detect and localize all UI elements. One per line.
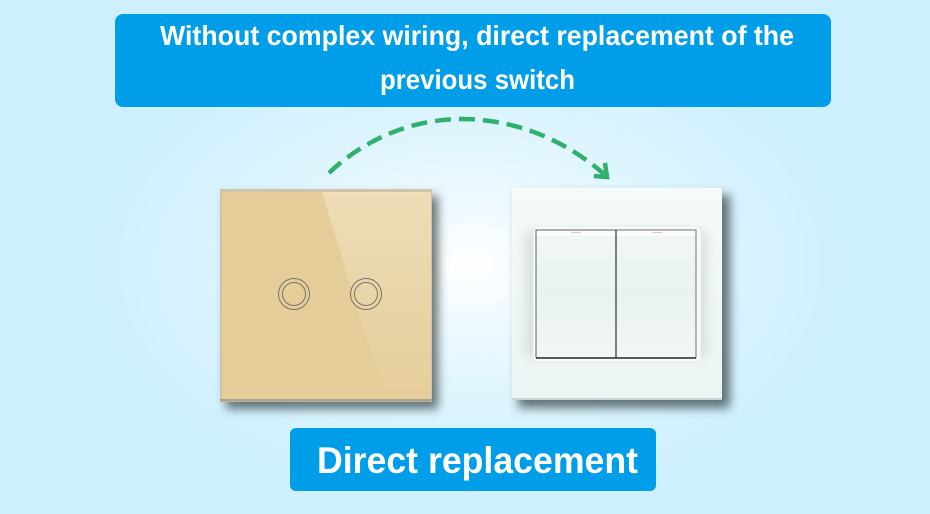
banner text line 2: previous switch (380, 64, 575, 95)
bottom label (290, 428, 656, 491)
touch button left (278, 278, 310, 310)
top banner (115, 14, 831, 107)
touch button right (350, 278, 382, 310)
arrow: dashed curve from touch switch to old switch (329, 119, 607, 177)
right rocker (616, 230, 696, 358)
traditional switch: white rocker plate (512, 188, 730, 408)
left rocker (536, 230, 616, 358)
touch switch: gold glass panel (220, 189, 438, 409)
label text: Direct replacement (317, 440, 638, 481)
banner text line 1: Without complex wiring, direct replacement of the (160, 20, 794, 51)
